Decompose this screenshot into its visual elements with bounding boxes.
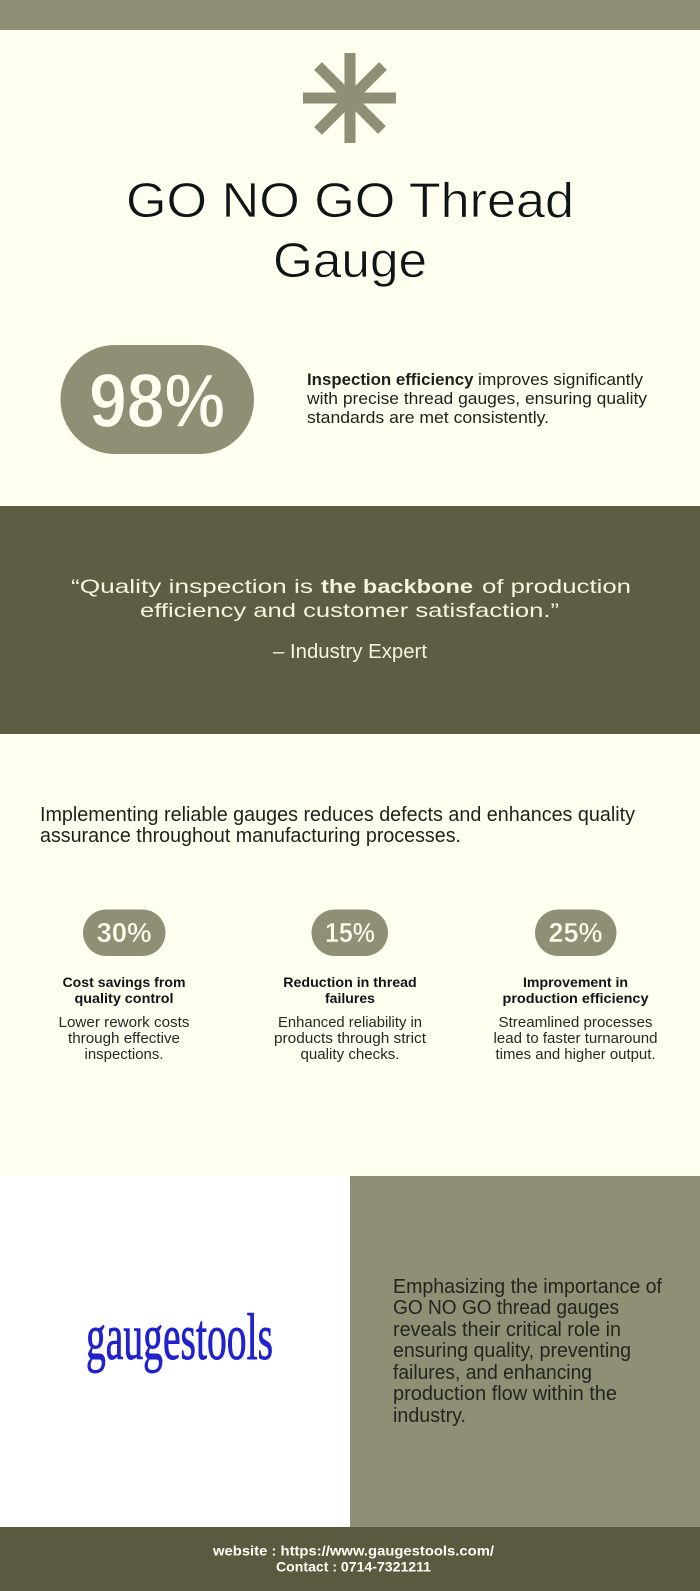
icon: asterisk — [303, 53, 396, 143]
description: production efficiency: lead to faster turnaround — [494, 1031, 658, 1047]
description: cost savings: through effective — [68, 1031, 180, 1047]
text block: inspection efficiency — [306, 370, 648, 427]
title: GO NO GO Thread — [126, 174, 574, 228]
conclusion text — [393, 1276, 662, 1427]
footer — [0, 1527, 700, 1591]
description: production efficiency: times and higher output. — [496, 1047, 656, 1063]
contact details — [212, 1542, 494, 1574]
description: production efficiency: Streamlined processes — [498, 1015, 652, 1031]
quote text: efficiency and customer satisfaction.” — [140, 600, 559, 622]
text block: implementing reliable gauges: Implementing reliable gauges reduces defects and enhances quality — [40, 804, 635, 826]
panel: quote — [0, 506, 700, 734]
pill: 30 percent: 30% — [96, 917, 152, 948]
heading: thread failures: failures — [325, 990, 375, 1006]
text block: inspection efficiency: improves significantly — [478, 370, 644, 389]
heading: production efficiency — [502, 974, 649, 1006]
text block: inspection efficiency: Inspection efficiency — [307, 370, 474, 389]
text block: inspection efficiency: standards are met consistently. — [307, 408, 549, 427]
heading: cost savings: Cost savings from — [62, 974, 186, 990]
text block: implementing reliable gauges: assurance throughout manufacturing processes. — [40, 825, 461, 847]
panel: cost savings stat — [58, 910, 190, 1063]
quote text: “Quality inspection is — [71, 576, 313, 598]
description: thread failures: products through strict — [274, 1031, 426, 1047]
title: Gauge — [273, 234, 427, 288]
heading: thread failures: Reduction in thread — [283, 974, 417, 990]
conclusion text: GO NO GO thread gauges — [393, 1297, 619, 1319]
conclusion text: production flow within the — [393, 1383, 617, 1405]
heading: production efficiency: Improvement in — [523, 974, 628, 990]
conclusion text: ensuring quality, preventing — [393, 1340, 631, 1362]
title — [126, 174, 574, 288]
quote text — [71, 576, 631, 622]
conclusion text: failures, and enhancing — [393, 1362, 592, 1384]
description: cost savings — [58, 1015, 190, 1063]
description: production efficiency — [494, 1015, 658, 1063]
quote text: the backbone — [321, 576, 473, 598]
description: thread failures: Enhanced reliability in — [278, 1015, 422, 1031]
conclusion text: industry. — [393, 1405, 466, 1427]
heading: production efficiency: production efficiency — [502, 990, 649, 1006]
description: cost savings: Lower rework costs — [58, 1015, 190, 1031]
panel: logo — [0, 1176, 350, 1527]
description: thread failures — [274, 1015, 426, 1063]
top bar — [0, 0, 700, 30]
stat: 98 percent pill — [60, 345, 254, 454]
contact details: Contact : 0714-7321211 — [276, 1558, 431, 1574]
conclusion text: Emphasizing the importance of — [393, 1276, 662, 1298]
description: thread failures: quality checks. — [300, 1047, 400, 1063]
panel: production efficiency stat — [494, 910, 658, 1063]
heading: thread failures — [283, 974, 417, 1006]
quote text: of production — [482, 576, 631, 598]
description: cost savings: inspections. — [84, 1047, 164, 1063]
panel: conclusion — [350, 1176, 700, 1527]
logo: gaugestools: gaugestools — [86, 1301, 273, 1374]
text block: implementing reliable gauges — [40, 804, 635, 847]
panel: thread failures stat — [274, 910, 426, 1063]
pill: 25 percent — [535, 910, 616, 956]
pill: 30 percent — [83, 910, 166, 956]
contact details: website : https://www.gaugestools.com/ — [212, 1542, 494, 1558]
quote attribution: – Industry Expert — [273, 641, 427, 663]
pill: 15 percent — [312, 910, 388, 956]
pill: 25 percent: 25% — [548, 917, 603, 948]
conclusion text: reveals their critical role in — [393, 1319, 621, 1341]
heading: cost savings — [62, 974, 186, 1006]
text block: inspection efficiency: with precise thread gauges, ensuring quality — [306, 389, 648, 408]
stat: 98 percent pill: 98% — [89, 359, 225, 444]
heading: cost savings: quality control — [74, 990, 174, 1006]
pill: 15 percent: 15% — [325, 917, 375, 948]
